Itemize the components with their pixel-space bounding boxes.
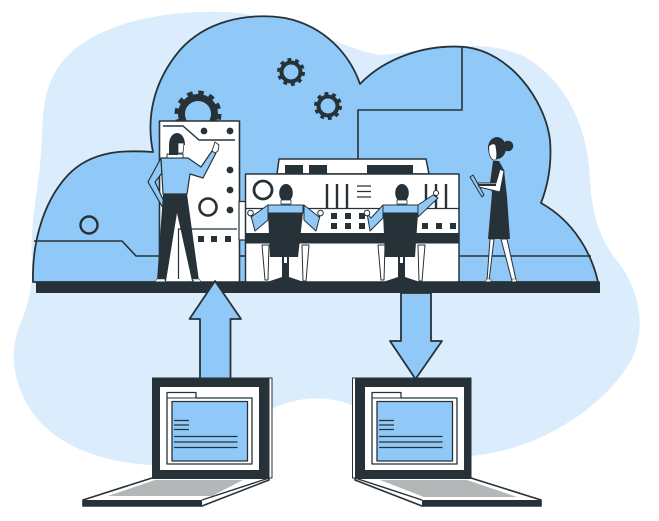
laptop right [352,378,541,506]
gear: small top [278,60,304,84]
woman with tablet [470,137,517,283]
platform [36,282,600,293]
standing man [148,133,219,284]
laptop left [83,378,272,506]
connector box [239,202,246,240]
server cabinet [160,121,240,282]
operator right [364,184,438,282]
gear: large [177,93,219,135]
console main [246,174,459,282]
cloud [33,16,598,282]
arrow up [190,281,241,379]
circuit lines [34,47,591,256]
console upper [277,159,429,174]
operator left [248,184,323,282]
arrow down [390,293,442,379]
gear: small lower [316,94,340,118]
